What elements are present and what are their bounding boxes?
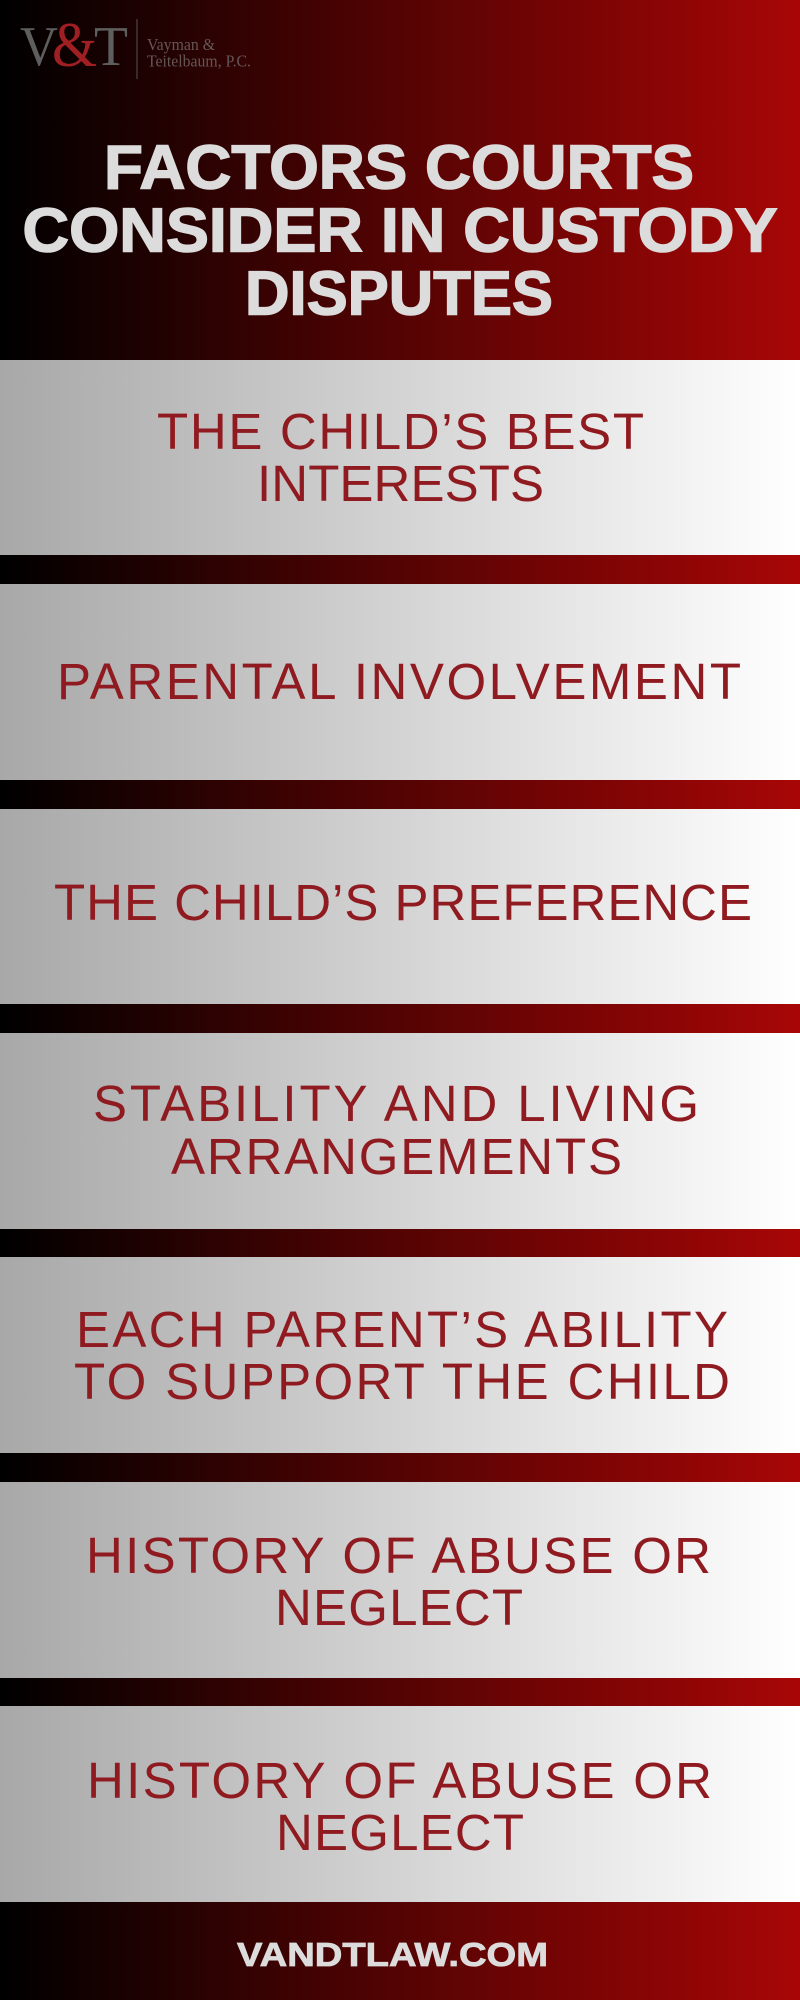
header panel bbox=[0, 0, 800, 360]
panel: history of abuse or neglect (repeat): HISTORY OF ABUSE OR bbox=[87, 1752, 712, 1809]
panel: history of abuse or neglect: HISTORY OF ABUSE OR bbox=[86, 1527, 711, 1584]
panel: the child's preference bbox=[0, 809, 800, 1004]
panel: parental involvement bbox=[0, 584, 800, 780]
logo: Vayman & Teitelbaum bbox=[20, 9, 251, 80]
panel: each parent's ability to support the child: TO SUPPORT THE CHILD bbox=[74, 1353, 730, 1410]
panel: stability and living arrangements: STABILITY AND LIVING bbox=[93, 1075, 699, 1132]
panel: history of abuse or neglect (repeat) bbox=[0, 1706, 800, 1902]
logo: Vayman & Teitelbaum: Teitelbaum, P.C. bbox=[147, 52, 251, 70]
logo: Vayman & Teitelbaum: Vayman & bbox=[147, 35, 215, 54]
title: FACTORS COURTS bbox=[104, 134, 694, 202]
title: CONSIDER IN CUSTODY bbox=[22, 196, 778, 266]
panel: stability and living arrangements bbox=[0, 1033, 800, 1229]
footer: website: VANDTLAW.COM bbox=[237, 1936, 548, 1973]
title bbox=[22, 134, 778, 328]
title: DISPUTES bbox=[245, 260, 553, 328]
panel: the child's preference: THE CHILD’S PREFERENCE bbox=[54, 874, 752, 931]
panel: the child's best interests: INTERESTS bbox=[257, 455, 544, 512]
panel: each parent's ability to support the child: EACH PARENT’S ABILITY bbox=[76, 1301, 728, 1358]
panel: history of abuse or neglect: NEGLECT bbox=[275, 1579, 523, 1636]
logo: Vayman & Teitelbaum: V bbox=[20, 16, 58, 78]
panel: the child's best interests bbox=[0, 360, 800, 555]
panel: the child's best interests: THE CHILD’S BEST bbox=[157, 403, 644, 460]
panel: each parent's ability to support the child bbox=[0, 1257, 800, 1453]
panel: history of abuse or neglect (repeat): NEGLECT bbox=[276, 1804, 524, 1861]
logo: Vayman & Teitelbaum: & bbox=[52, 9, 97, 80]
panel: parental involvement: PARENTAL INVOLVEMENT bbox=[57, 653, 741, 710]
logo: Vayman & Teitelbaum: T bbox=[94, 16, 128, 78]
panel: history of abuse or neglect bbox=[0, 1482, 800, 1678]
panel: stability and living arrangements: ARRANGEMENTS bbox=[171, 1128, 622, 1185]
